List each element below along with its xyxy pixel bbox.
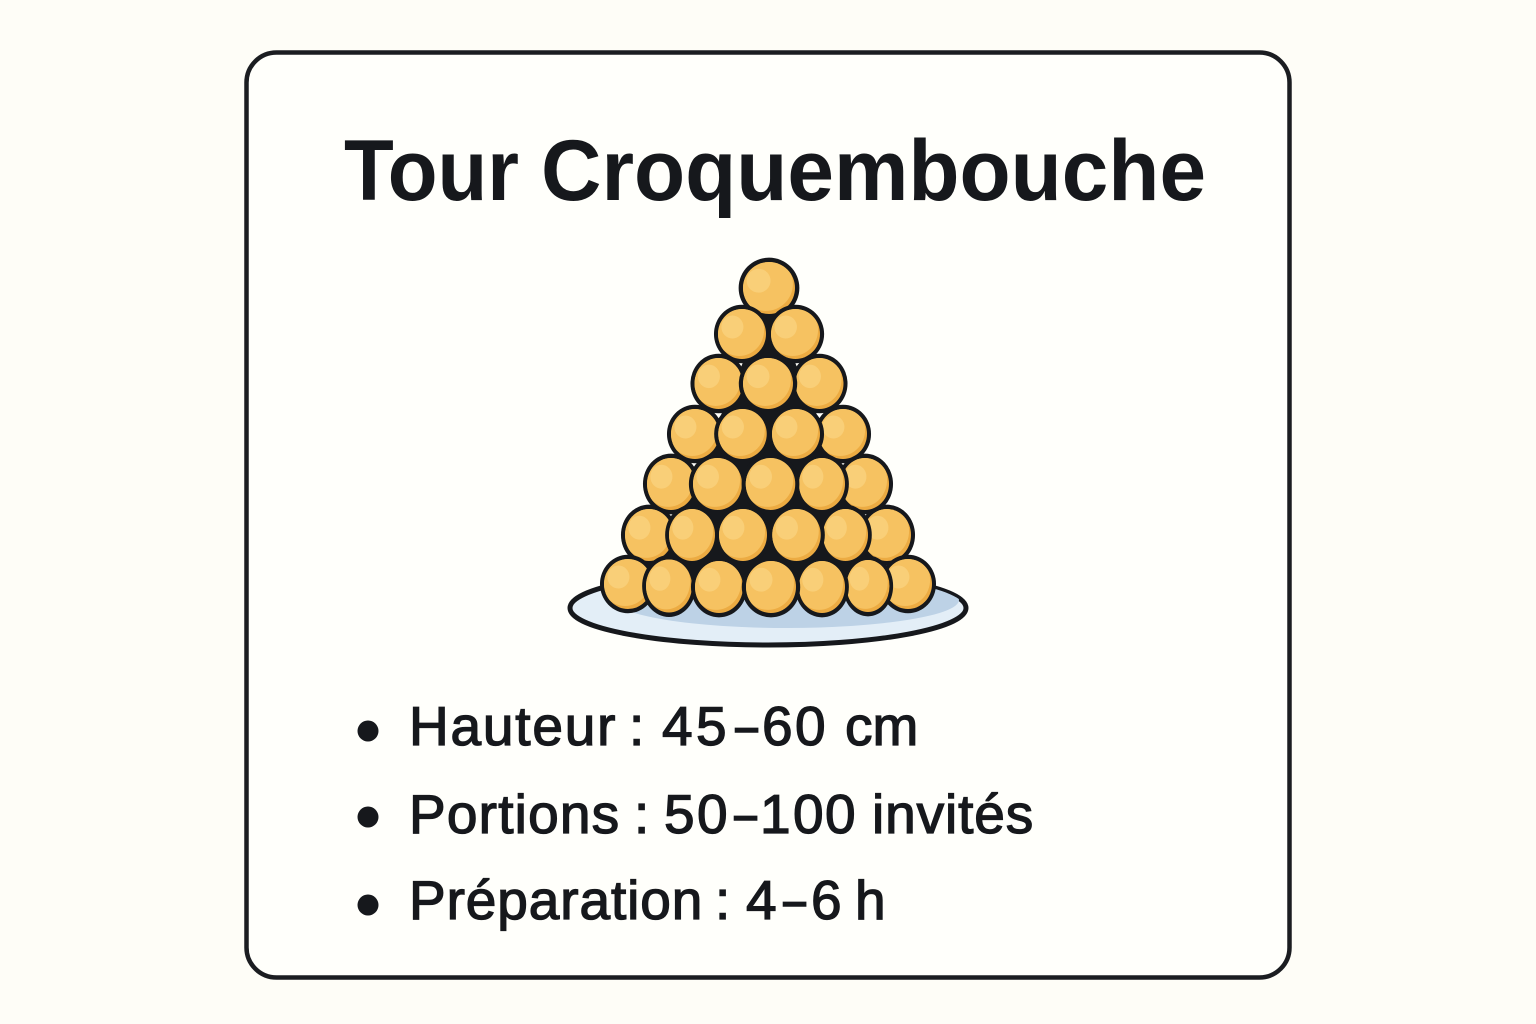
fact: préparation: :	[715, 869, 730, 931]
fact: hauteur: –	[736, 707, 758, 749]
fact: portions: :	[634, 783, 649, 845]
fact: hauteur: :	[629, 695, 644, 757]
list of facts	[358, 695, 1034, 931]
puff row 3	[690, 353, 848, 413]
fact: hauteur: cm	[845, 695, 918, 757]
puff row 2	[714, 304, 824, 363]
plate	[568, 586, 968, 648]
puff row 1	[739, 257, 799, 318]
fact: portions: invités	[872, 783, 1034, 845]
illustration: croquembouche tower	[570, 257, 966, 645]
fact: portions: 50	[664, 783, 728, 845]
puff row 5	[643, 453, 893, 514]
fact: préparation: 6	[811, 869, 842, 931]
fact: portions: Portions	[409, 783, 620, 845]
fact: hauteur: Hauteur	[409, 695, 617, 757]
fact: hauteur: 60	[762, 695, 826, 757]
fact: préparation: 4	[746, 869, 777, 931]
fact: hauteur	[358, 695, 918, 757]
fact: préparation	[358, 869, 886, 931]
fact: portions	[358, 783, 1034, 845]
fact: préparation: Préparation	[409, 869, 703, 931]
fact: portions: –	[735, 795, 757, 837]
fact: hauteur: 45	[662, 695, 727, 757]
puff row 4	[667, 404, 871, 463]
panel: card	[246, 52, 1290, 978]
fact: préparation: h	[855, 869, 886, 931]
puff row 7	[600, 554, 936, 617]
title: Croquembouche	[541, 123, 1206, 219]
fact: portions: 100	[760, 783, 856, 845]
puff row 6	[621, 504, 915, 565]
fact: préparation: –	[784, 881, 806, 923]
dark fill between puffs	[648, 300, 890, 590]
title: Tour	[344, 123, 519, 219]
